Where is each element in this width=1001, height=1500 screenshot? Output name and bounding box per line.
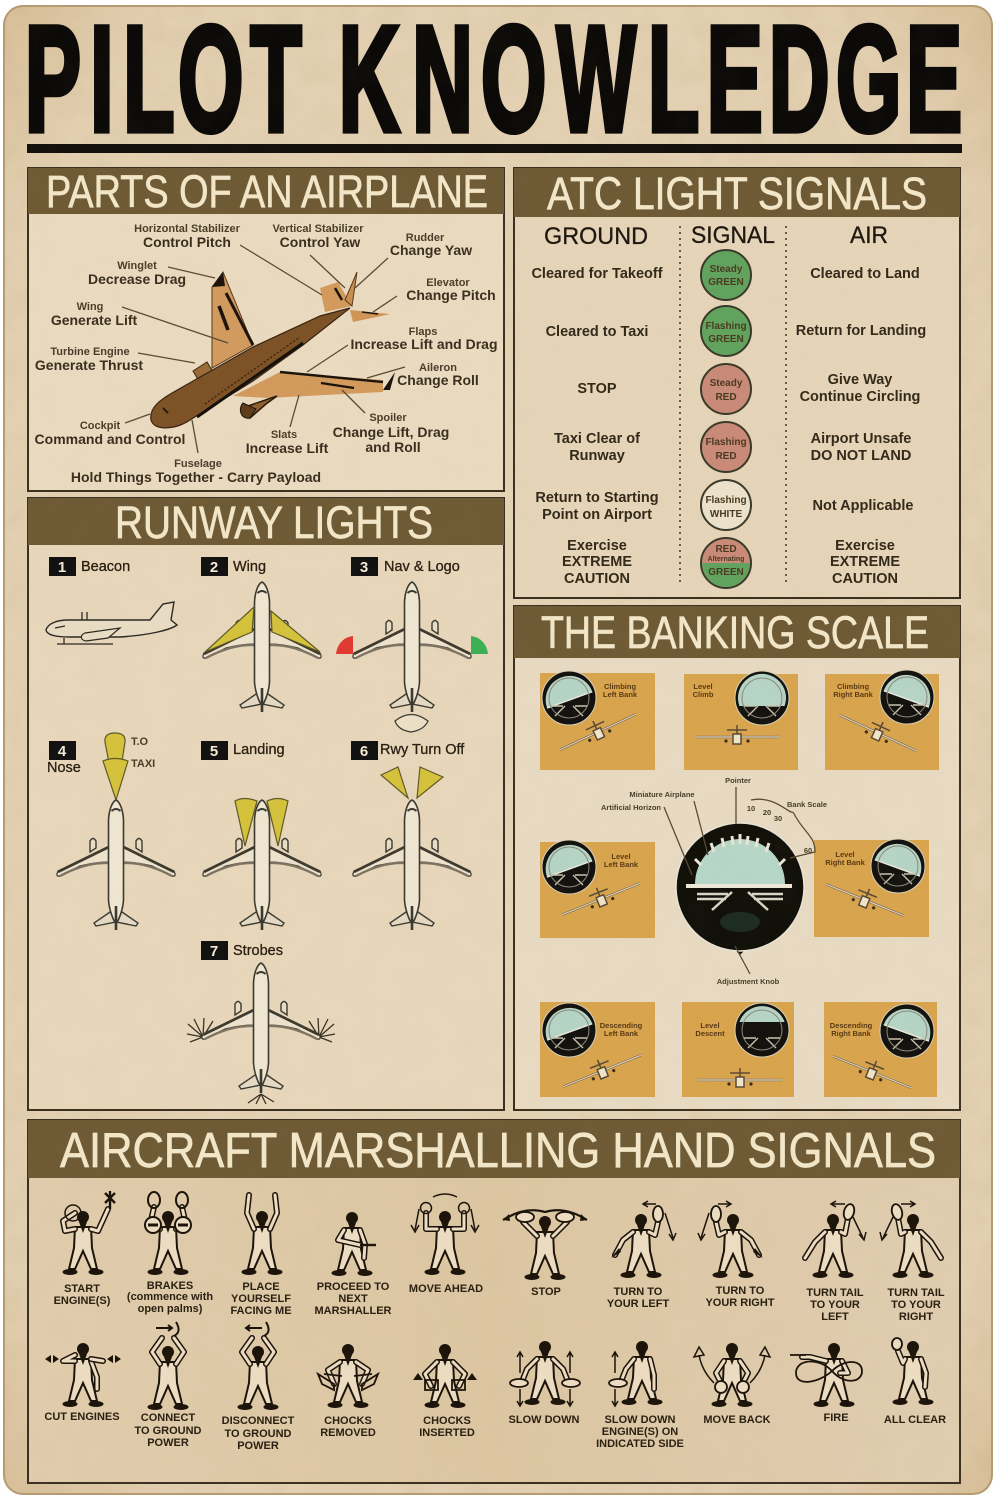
signal: start engines [54,1191,115,1307]
airplane part labels: Change Pitch [406,287,496,303]
card: level left bank [539,838,655,938]
central attitude indicator [676,823,804,955]
light 5: landing [201,741,321,930]
signal: turn to your left: YOUR LEFT [607,1298,669,1310]
airplane part labels: Fuselage [174,458,222,470]
signal: turn to your right: TURN TO [716,1285,765,1297]
signal: connect to ground power [134,1322,202,1449]
light 2: wing: Wing [233,559,266,575]
card: descending right bank: Descending [830,1021,873,1030]
signal: turn tail to your left: TO YOUR [810,1299,860,1311]
gauge callouts: Pointer [725,776,751,785]
row: flashing red: Taxi Clear of [554,431,640,447]
card: descending left bank: Left Bank [604,1029,639,1038]
signal: proceed to next marshaller: NEXT [338,1293,368,1305]
light 1: beacon: Beacon [81,559,130,575]
row: flashing white: WHITE [710,509,742,520]
signal: all clear: ALL CLEAR [884,1414,946,1426]
airplane part labels: Aileron [419,362,457,374]
row: alternating red and green: GREEN [708,567,744,578]
airplane part labels: Control Yaw [280,234,360,250]
airplane part labels: Command and Control [35,431,185,447]
signal: connect to ground power: TO GROUND [134,1425,202,1437]
airplane part labels: Generate Thrust [35,357,143,373]
gauge callouts: Artificial Horizon [601,803,661,812]
airplane part labels: Slats [271,429,297,441]
column headings: GROUND [544,223,648,250]
card: climbing left bank: Left Bank [603,690,638,699]
card: level right bank: Level [835,850,855,859]
signal: slow down engines on indicated side: SLOW DOWN [605,1414,675,1426]
airplane part labels: Decrease Drag [88,271,186,287]
airplane part labels: Generate Lift [51,312,138,328]
light 7: strobes [187,941,335,1104]
signal: move back [694,1343,771,1426]
signal: chocks removed: REMOVED [320,1427,376,1439]
light 5: landing: Landing [233,742,285,758]
row: steady red: STOP [577,381,617,397]
row: alternating red and green: CAUTION [832,571,898,587]
row: steady red: Continue Circling [800,389,920,405]
gauge callouts: Bank Scale [787,800,827,809]
signal: chocks removed: CHOCKS [324,1415,372,1427]
light 4: nose: 4 [58,743,67,760]
signal: place yourself facing me [230,1195,292,1317]
signal: slow down: SLOW DOWN [509,1414,579,1426]
signal: fire [790,1343,862,1424]
gauge callouts: 60 [804,846,812,855]
signal: fire: FIRE [823,1412,849,1424]
airplane part labels: Cockpit [80,420,121,432]
signal: stop: STOP [531,1286,561,1298]
light 4: nose [47,733,175,930]
signal: disconnect to ground power: POWER [237,1440,279,1452]
light 3: nav and logo [336,557,488,732]
card: level descent [682,1002,794,1097]
signal: turn tail to your right: RIGHT [899,1311,933,1323]
heading: parts of an airplane: PARTS OF AN AIRPLANE [46,166,488,217]
signal: proceed to next marshaller [314,1212,392,1317]
airplane part labels: Hold Things Together - Carry Payload [71,469,321,485]
row: flashing white [535,480,913,530]
card: level climb: Level [693,682,713,691]
signal: proceed to next marshaller: PROCEED TO [317,1281,390,1293]
light 4: nose: T.O [131,736,149,748]
signal: chocks inserted: INSERTED [419,1427,475,1439]
airplane part labels: Wing [77,301,103,313]
column headings: AIR [850,222,888,249]
signal: turn to your left [607,1201,676,1310]
light 6: runway turn off: 6 [360,743,368,760]
signal: place yourself facing me: PLACE [242,1281,280,1293]
signal: turn tail to your left: LEFT [821,1311,849,1323]
light 6: runway turn off: Rwy Turn Off [380,742,465,758]
light 1: beacon: 1 [58,559,66,576]
gauge callouts: 30 [774,814,782,823]
airplane part labels: Horizontal Stabilizer [134,223,241,235]
airplane part labels: Increase Lift [246,440,329,456]
panel: the banking scale [514,606,960,1110]
gauge callouts: 20 [763,808,771,817]
airplane part labels [35,223,498,485]
heading: atc light signals: ATC LIGHT SIGNALS [547,168,927,219]
card: climbing right bank [825,668,939,770]
card: level descent: Level [700,1021,720,1030]
row: steady green: Cleared for Takeoff [531,266,663,282]
signal: disconnect to ground power: TO GROUND [224,1428,292,1440]
light 7: strobes: Strobes [233,943,283,959]
card: climbing left bank [539,669,655,770]
row: alternating red and green: EXTREME [830,554,900,570]
row: flashing white: Flashing [705,495,747,506]
panel: aircraft marshalling hand signals [28,1120,960,1483]
signal: turn tail to your right: TO YOUR [891,1299,941,1311]
light 2: wing [201,557,321,712]
row: flashing green: Cleared to Taxi [546,324,648,340]
heading: runway lights: RUNWAY LIGHTS [115,497,433,548]
row: flashing red [554,422,911,472]
signal: turn tail to your right: TURN TAIL [887,1287,945,1299]
card: descending right bank: Right Bank [831,1029,872,1038]
leader lines [122,245,405,453]
signal: turn to your left: TURN TO [614,1286,663,1298]
signal: chocks removed [318,1344,378,1439]
light 4: nose: Nose [47,760,81,776]
signal: place yourself facing me: FACING ME [230,1305,292,1317]
row: alternating red and green: CAUTION [564,571,630,587]
signal: chocks inserted: CHOCKS [423,1415,471,1427]
row: flashing red: RED [715,451,737,462]
signal: start engines: ENGINE(S) [54,1295,111,1307]
panel: parts of an airplane [28,166,504,491]
airplane part labels: Rudder [406,232,445,244]
row: steady red [577,364,920,414]
light 3: nav and logo: 3 [360,559,368,576]
light 5: landing: 5 [210,743,218,760]
signal: turn to your right: YOUR RIGHT [705,1297,775,1309]
signal: all clear [884,1338,946,1426]
signal: stop [503,1210,587,1298]
light 1: beacon [46,557,177,644]
airplane part labels: Elevator [426,277,470,289]
card: level climb: Climb [693,690,714,699]
signal: connect to ground power: POWER [147,1437,189,1449]
column headings [544,222,888,586]
row: steady green: GREEN [708,277,744,288]
row: flashing red: Runway [569,448,625,464]
row: steady red: Give Way [828,372,892,388]
card: climbing right bank: Climbing [837,682,869,691]
row: flashing white: Return to Starting [535,490,659,506]
signal: disconnect to ground power [222,1322,295,1452]
signal: turn tail to your left: TURN TAIL [806,1287,864,1299]
signal: turn to your right [698,1201,775,1309]
signal: proceed to next marshaller: MARSHALLER [314,1305,392,1317]
airplane part labels: Change Roll [397,372,479,388]
column headings: SIGNAL [691,222,775,249]
light 3: nav and logo: Nav & Logo [384,559,460,575]
signal: connect to ground power: CONNECT [141,1412,195,1424]
row: steady green: Cleared to Land [810,266,920,282]
gauge callouts: Miniature Airplane [629,790,695,799]
signal: slow down engines on indicated side: INDICATED SIDE [596,1438,684,1450]
card: level climb [684,671,798,770]
row: flashing white: Point on Airport [542,507,652,523]
row: flashing green: Flashing [705,321,747,332]
card: level right bank [814,837,929,937]
light 2: wing: 2 [210,559,218,576]
light 6: runway turn off [351,741,471,930]
signal: move ahead [409,1194,483,1295]
airplane part labels: Increase Lift and Drag [350,336,498,352]
row: flashing red: Airport Unsafe [811,431,911,447]
card: climbing left bank: Climbing [604,682,636,691]
airplane part labels: Flaps [409,326,437,338]
signal: turn tail to your right [880,1201,945,1323]
airplane part labels: Change Lift, Drag [333,424,449,440]
row: flashing green: GREEN [708,334,744,345]
signal: brakes: open palms) [138,1303,203,1315]
airplane part labels: Change Yaw [390,242,472,258]
card: climbing right bank: Right Bank [833,690,874,699]
signal: place yourself facing me: YOURSELF [231,1293,291,1305]
airplane part labels: Winglet [117,260,157,272]
signal: brakes [127,1192,213,1315]
airplane part labels: Vertical Stabilizer [272,223,364,235]
gauge callouts: 10 [747,804,755,813]
airplane part labels: Spoiler [369,412,407,424]
airplane part labels: Control Pitch [143,234,231,250]
card: level left bank: Level [611,852,631,861]
row: steady red: Steady [710,378,743,389]
row: alternating red and green: RED [715,544,737,555]
row: alternating red and green: Exercise [567,538,627,554]
airplane illustration [151,272,395,428]
card: descending left bank: Descending [600,1021,643,1030]
row: flashing red: Flashing [705,437,747,448]
signal: start engines: START [64,1283,100,1295]
signal: cut engines: CUT ENGINES [44,1411,120,1423]
panel: atc light signals [514,168,960,598]
row: alternating red and green: Exercise [835,538,895,554]
row: flashing green [546,306,926,356]
signal: turn tail to your left [805,1201,866,1323]
row: flashing white: Not Applicable [813,498,913,514]
title rule [27,144,962,153]
heading: the banking scale: THE BANKING SCALE [541,607,929,658]
signal: slow down engines on indicated side: ENGINE(S) ON [602,1426,678,1438]
signal: move back: MOVE BACK [703,1414,771,1426]
row: flashing green: Return for Landing [796,323,926,339]
light 7: strobes: 7 [210,943,218,960]
signal: brakes: BRAKES [147,1280,193,1292]
airplane part labels: and Roll [365,439,421,455]
signal: slow down [509,1341,580,1426]
gauge callouts [601,776,827,986]
row: steady green [531,250,920,300]
signal: move ahead: MOVE AHEAD [409,1283,483,1295]
row: flashing red: DO NOT LAND [811,448,911,464]
card: descending left bank [539,1001,655,1097]
row: alternating red and green: Alternating [708,556,744,563]
light 4: nose: TAXI [131,758,155,770]
signal: chocks inserted [413,1344,477,1439]
airplane part labels: Turbine Engine [50,346,130,358]
signal: slow down engines on indicated side [596,1341,684,1450]
gauge callouts: Adjustment Knob [717,977,780,986]
row: steady red: RED [715,392,737,403]
card: descending right bank [824,1002,937,1097]
row: alternating red and green [562,538,900,588]
card: level right bank: Right Bank [825,858,866,867]
card: level left bank: Left Bank [604,860,639,869]
card: level descent: Descent [695,1029,725,1038]
row: alternating red and green: EXTREME [562,554,632,570]
panel: runway lights [28,497,504,1110]
signal: disconnect to ground power: DISCONNECT [222,1415,295,1427]
row: steady green: Steady [710,264,743,275]
signal: brakes: (commence with [127,1291,213,1303]
signal: cut engines [44,1343,121,1423]
